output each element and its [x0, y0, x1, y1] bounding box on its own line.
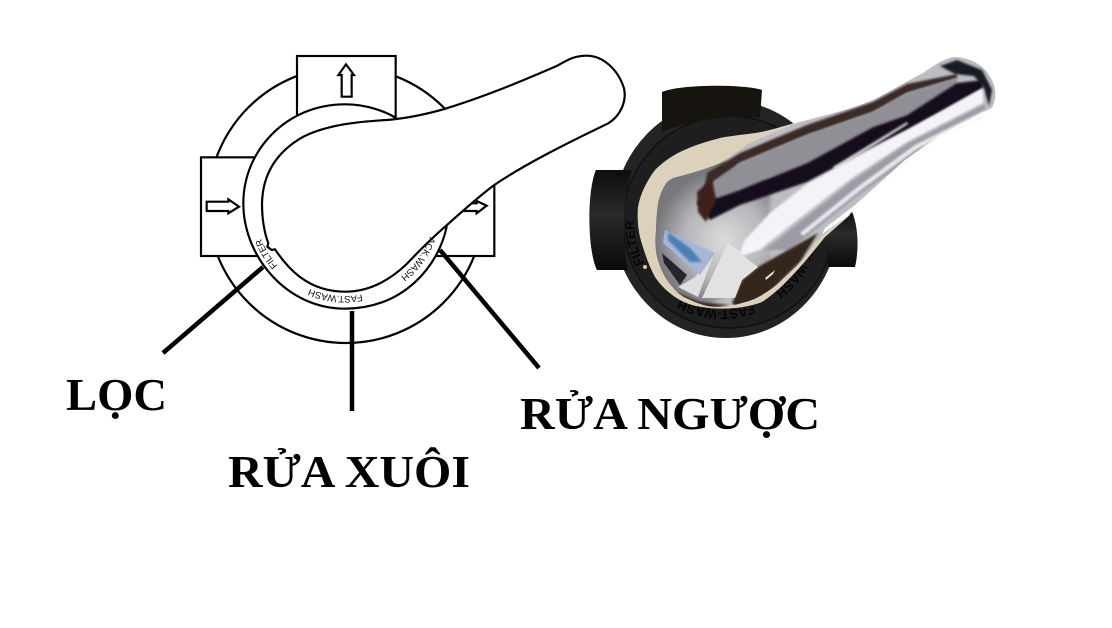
callout line: fast wash — [350, 311, 354, 411]
brown blob at stripe end — [697, 178, 716, 222]
valve body — [613, 100, 839, 338]
bulb shading — [650, 160, 770, 310]
chrome base — [676, 57, 996, 307]
lower grey streak — [765, 104, 985, 250]
handle outline — [262, 56, 625, 292]
left port — [589, 170, 632, 270]
handle tip dark — [940, 60, 992, 106]
right port — [822, 207, 858, 267]
valve outer circle — [208, 67, 484, 343]
white streak in black band — [833, 122, 908, 170]
cast label: filter: FILTER — [625, 220, 644, 266]
lower dark reflection — [732, 233, 818, 310]
upper dark band — [703, 74, 957, 197]
cast label: back wash: K.WASH — [776, 254, 814, 298]
edge highlight — [822, 107, 995, 234]
top port — [662, 86, 762, 132]
ring label: fast wash: FAST.WASH — [308, 289, 362, 303]
light streak above edge — [800, 110, 987, 236]
top port box — [297, 56, 396, 119]
ring label: filter: FILTER — [256, 239, 278, 270]
white highlight band — [738, 88, 983, 257]
inner ring — [623, 116, 835, 328]
dark reflection — [662, 253, 687, 285]
dial ring — [243, 104, 447, 309]
callout line: filter — [163, 267, 263, 353]
bottom brown reflection — [678, 292, 730, 307]
white wedge reflection — [702, 243, 758, 298]
cast label: fast wash: FAST-WASH — [677, 300, 755, 319]
cast text on body — [625, 220, 814, 319]
icon: left port arrow — [207, 199, 239, 213]
icon: up arrow — [338, 64, 354, 97]
blue ink patch — [668, 232, 702, 262]
blue paper reflection — [663, 230, 715, 275]
beige dial crescent — [638, 122, 850, 309]
small highlight on dark reflection — [765, 270, 775, 280]
label: LỌC: LỌC — [66, 369, 167, 420]
photo: chrome valve handle — [589, 57, 996, 338]
pale wall reflection — [678, 248, 716, 297]
label: RỬA XUÔI: RỬA XUÔI — [228, 446, 470, 497]
label: RỬA NGƯỢC: RỬA NGƯỢC — [520, 388, 820, 439]
ring label: back wash: ACK.WASH — [401, 236, 435, 282]
chrome handle — [655, 57, 996, 307]
icon: right port arrow — [462, 201, 487, 213]
left port box — [201, 157, 264, 256]
beige rivet dot — [643, 265, 647, 269]
callout line: back wash — [440, 250, 539, 368]
technical drawing: valve diagram — [201, 56, 625, 343]
dial text: curved ring labels — [256, 236, 435, 303]
light grey band — [703, 78, 957, 198]
right port box — [423, 173, 494, 256]
black band — [697, 80, 983, 220]
